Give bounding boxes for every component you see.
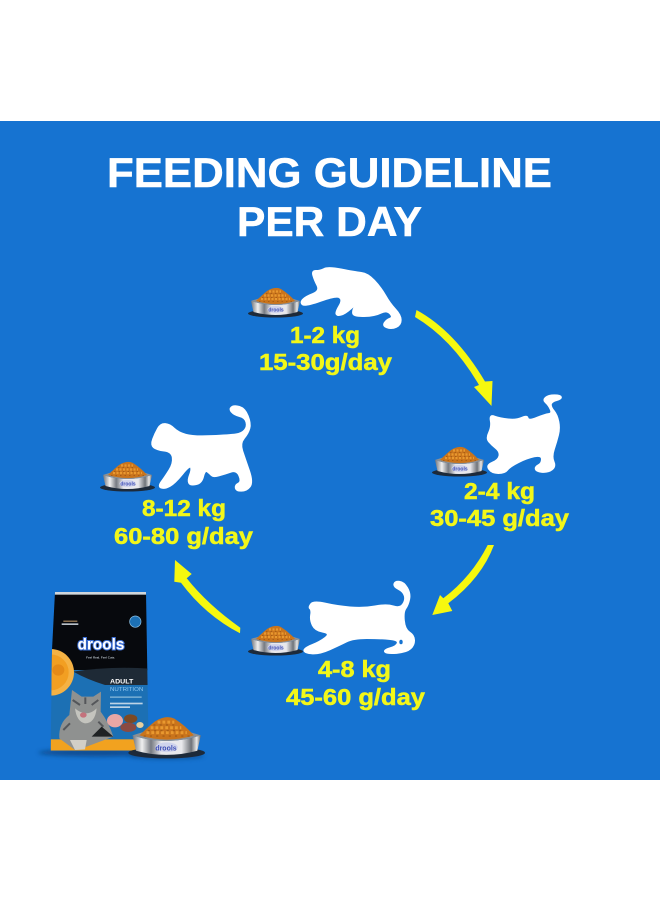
weight and amount label: 8-12 kg bbox=[142, 495, 226, 521]
blue background panel bbox=[0, 121, 660, 780]
product: drools cat food bag bbox=[27, 592, 205, 759]
packed bowl: drools bbox=[155, 745, 177, 752]
icon: food bowl bbox=[100, 462, 155, 492]
packed bowl bbox=[128, 717, 205, 758]
weight and amount label: 1-2 kg bbox=[290, 322, 360, 348]
stage: 2-4 kg bbox=[430, 395, 569, 531]
weight and amount label bbox=[430, 478, 569, 531]
weight and amount label: 15-30g/day bbox=[259, 349, 392, 375]
cat photo bbox=[59, 690, 113, 750]
weight and amount label bbox=[259, 322, 392, 375]
title: FEEDING GUIDELINE bbox=[107, 149, 552, 196]
icon: cat silhouette bbox=[487, 395, 561, 473]
product name: NUTRITION bbox=[110, 687, 143, 693]
icon: food bowl bbox=[248, 626, 303, 656]
weight and amount label bbox=[114, 495, 253, 549]
icon: cat silhouette bbox=[152, 406, 251, 491]
infographic canvas bbox=[0, 121, 660, 780]
icon: food bowl: drools bbox=[120, 482, 136, 488]
stage: 4-8 kg bbox=[248, 581, 425, 710]
weight and amount label: 45-60 g/day bbox=[286, 684, 425, 710]
ingredients bbox=[107, 714, 144, 732]
arrow: third to fourth stage bbox=[174, 560, 240, 633]
arrow: second to third stage bbox=[432, 545, 494, 615]
brand logo: drools bbox=[78, 636, 124, 653]
weight and amount label: 60-80 g/day bbox=[114, 523, 253, 549]
product name: ADULT bbox=[110, 678, 133, 685]
icon: food bowl bbox=[248, 288, 303, 318]
icon: food bowl: drools bbox=[452, 466, 468, 472]
tagline: Feel Real. Feel Cute. bbox=[86, 656, 115, 660]
icon: food bowl: drools bbox=[268, 308, 284, 314]
stage: 8-12 kg bbox=[100, 406, 253, 549]
title: PER DAY bbox=[237, 198, 422, 245]
icon: food bowl: drools bbox=[268, 646, 284, 652]
icon: cat silhouette bbox=[301, 268, 401, 328]
product name bbox=[110, 678, 143, 693]
icon: cat silhouette bbox=[304, 581, 414, 654]
weight and amount label bbox=[286, 656, 425, 710]
weight and amount label: 2-4 kg bbox=[464, 478, 535, 504]
weight badge bbox=[130, 616, 141, 627]
weight and amount label: 30-45 g/day bbox=[430, 505, 569, 531]
title bbox=[107, 149, 552, 245]
arrow: first to second stage bbox=[415, 310, 492, 406]
stage: 1-2 kg bbox=[248, 268, 401, 375]
weight and amount label: 4-8 kg bbox=[318, 656, 391, 682]
